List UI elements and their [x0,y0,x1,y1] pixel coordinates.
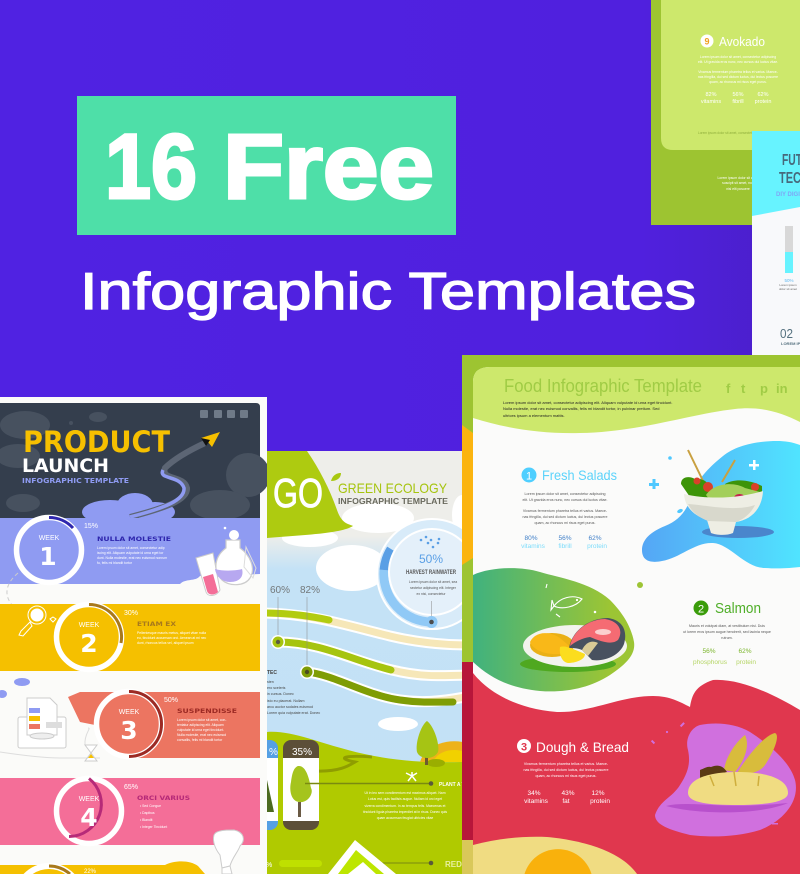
dough and bread text [524,762,609,778]
social icons [200,410,248,418]
salmon text: Mauris et volutpat diam, at vestibulum nisi. Duis [689,624,765,628]
value: 35% [292,747,312,758]
salmon stats: 62% [738,648,752,655]
avocado stats: 56% [732,92,744,98]
avocado footer text: nisl elit posuere [726,187,750,191]
percent: 15% [84,523,98,530]
salmon heading: Salmon [715,601,761,617]
fresh salads text: quam, ac rhoncus mi risus eget purus. [535,521,595,525]
gauge text: sectetur adipiscing elit. Integer [410,586,457,590]
title: product: PRODUCT [23,425,170,459]
ribbon three [307,672,470,702]
green ecology heading: GREEN ECOLOGY [338,480,448,496]
left text fragment: Lorem quia vulputate erat. Donec [267,711,320,715]
salmon text [683,624,771,640]
heading: NULLA MOLESTIE [97,535,171,543]
fresh salads stats: fibrill [558,543,572,550]
progress label: Lorem ipsum [779,283,797,287]
section number 02: 02 [780,326,793,341]
fresh salads text: Lorem ipsum dolor sit amet, consectetur adipiscing [525,492,605,496]
icon: magnifier [19,606,56,636]
body: dunt, rhoncus tellus vel, aliquet ipsum [137,641,194,645]
ribbon two [278,642,470,676]
icon: leaf [331,473,341,481]
icon: document and computer [0,698,100,761]
salmon heading [694,600,761,617]
avocado footer text: suscipit sit amet, non [722,181,754,185]
progress label [779,279,797,290]
plant a tree text: Ut in leo sem condimentum est maximus aliquet. Nam [364,791,446,795]
fresh salads stats: vitamins [521,543,546,550]
avocado body text [698,55,778,84]
small clouds [0,678,30,698]
fresh salads heading: Fresh Salads [542,467,617,483]
subtitle: Infographic Templates [80,263,696,321]
intro text: Lorem ipsum dolor sit amet, consectetur adipiscing elit. Aliquam vulputate id urna eget tincidunt. [503,400,672,405]
salmon heading: 2 [698,604,704,616]
bullet list: • Integer Tincidunt [140,825,167,829]
plant a tree text: viverra condimentum. In ac tempus felis. Maecenas et [364,804,446,808]
body: vulputate id urna eget tincidunt. [177,728,224,732]
salmon stats [693,648,756,666]
title badge [77,96,456,235]
week number: 2 [80,629,98,658]
panel: avocado template card [651,0,800,225]
avocado body text: quam, ac rhoncus mi risus eget purus. [709,80,767,84]
salmon text: ut lorem eros ipsum augue hendrerit, sed lacinia neque [683,630,771,634]
dough and bread stats: fat [562,798,570,805]
dough and bread stats [524,790,610,805]
fresh salads text: elit. Ut gravida eros nunc, nec cursus dui luctus vitae. [523,498,607,502]
avocado stats: fibrill [732,99,744,105]
future tech title [779,154,800,183]
partial progress ring [24,863,74,874]
plant a tree row: PLANT A TREE [439,782,476,788]
reduce row [266,860,479,869]
green dot [637,582,643,588]
social icons: t [741,381,746,396]
progress ring [56,778,122,844]
heading: ETIAM EX [137,620,176,628]
left text fragment: TEC [267,670,277,676]
title: 16 Free: 16 [105,116,197,218]
storm clouds [0,411,270,520]
social icons [726,384,787,396]
week label: WEEK [79,796,100,803]
periwinkle cloud [82,493,175,524]
bullet list: • Blandit [140,818,153,822]
avocado body text: nas fringilla, dui sed dictum luctus, dui lectus posuere [698,75,778,79]
section caption: LOREM IP [781,341,800,346]
title: 16 Free: Free [223,116,434,218]
percent: 50% [164,697,178,704]
week 2 band [0,604,260,671]
progress ring [56,604,122,670]
avocado stats: protein [755,99,771,105]
icon: sparkle [406,772,417,781]
left text fragment [267,670,320,715]
avocado stats: vitamins [701,99,721,105]
bullet list: • Dapibus [140,811,155,815]
header wave [473,367,800,433]
intro text: ultrices ipsum a elementum mattis. [503,413,565,418]
progress ring [16,517,82,582]
percent labels: 60% [270,585,290,596]
avocado body text: Lorem ipsum dolor sit amet, consectetur adipiscing [700,55,776,59]
body: iscing elit. Aliquam vulputate id urna eget tor [97,551,164,555]
title: infographic template: INFOGRAPHIC TEMPLATE [22,477,129,485]
fresh salads text: Vivamus fermentum pharetra tellus et varius. Maece- [523,509,608,513]
clouds [282,495,472,731]
avocado stats: 82% [705,92,717,98]
avocado footer text: Lorem ipsum dolor sit amet [718,176,758,180]
icon: tree [290,766,312,817]
icon: number 9: 9 [704,36,710,46]
bullet list [140,804,167,829]
icon: recycle triangle [328,840,396,874]
icon: tree and hill [417,721,470,767]
dough and bread stats: 34% [527,790,541,797]
body [137,631,206,645]
percent labels: 82% [300,585,320,596]
gauge marker [426,601,438,628]
icon: bread [666,733,788,812]
dark header [0,403,270,524]
panel: future tech template card [752,131,800,355]
avocado body text: elit. Ut gravida eros nunc, nec cursus dui luctus vitae. [698,60,778,64]
dough and bread stats: vitamins [524,798,549,805]
progress bar [785,226,793,273]
icon: salmon plate [520,618,627,672]
dough and bread stats: protein [590,798,610,805]
green blob [473,568,634,691]
heading: SUSPENDISSE [177,707,237,715]
week 4 band [0,778,260,845]
salmon stats: 56% [702,648,716,655]
bullet list: • Sed Congue [140,804,161,808]
cream blob with orange [473,837,637,874]
fresh salads text [523,492,608,525]
red section [473,673,800,874]
body: Lorem ipsum dolor sit amet, consectetur adip [97,546,165,550]
icon: fish [546,584,596,617]
body [97,546,167,565]
decorative plus signs [649,456,759,514]
title: launch: LAUNCH [22,455,109,477]
progress label: 50% [784,278,794,283]
infographic template subheading: INFOGRAPHIC TEMPLATE [338,496,448,506]
avocado stats: 62% [757,92,769,98]
fresh salads stats: protein [587,543,607,550]
avokado heading: Avokado [719,35,765,49]
reduce row: % [266,862,272,869]
reduce row: REDUCE [445,860,479,869]
blue blob [642,441,800,568]
progress label: dolor sit amet [779,287,797,291]
left text fragment: arcu auctor sodales euismod [267,705,313,709]
wavy ribbons [260,613,470,702]
left strip colours [462,425,473,874]
percent: 30% [124,610,138,617]
plant a tree text: Lotus est, quis facilisis augue. Nullam id orci eget [368,797,442,801]
green ground [267,732,462,874]
body: fu, felis mi blandit tortor [97,561,133,565]
week label: WEEK [79,622,100,629]
heading: ORCI VARIUS [137,794,190,802]
dough and bread heading: 3 [521,742,527,754]
week number: 1 [39,542,57,571]
ribbon markers [271,597,314,679]
salmon stats: phosphorus [693,659,728,666]
body: convallis, felis mi blandit tortor [177,738,223,742]
percent labels [270,585,320,596]
tree card: blue [240,740,278,830]
left text fragment: isto eu placerat. Nullam [267,699,305,703]
week 3 band [0,678,260,761]
progress ring [96,692,162,756]
body: tentatur adipiscing elit. Aliquam [177,723,224,727]
fresh salads stats: 56% [558,535,572,542]
plant a tree text: tincidunt ligula pharetra imperdiet at in risus. Donec quis [363,810,447,814]
gauge text: Lorem ipsum dolor sit amet, sea [409,580,457,584]
body: dunt. Nulla molestie, erat nec euismod nonrum [97,556,167,560]
left text fragment: ero sceleris [267,686,286,690]
avocado body text: Vivamus fermentum pharetra tellus et varius. Maece- [698,70,778,74]
dough and bread stats: 43% [561,790,575,797]
gauge value: 50% [419,552,443,566]
social icons: in [776,381,788,396]
body: Pellentesque mauris metus, aliquet vitae nulla [137,631,206,635]
panel: product launch template [0,397,270,874]
fresh salads heading: 1 [526,470,532,482]
road [130,443,205,517]
salmon text: rutrum. [721,636,733,640]
fresh salads stats: 62% [588,535,602,542]
icon: flask and test tube [196,527,256,596]
fresh salads text: nas fringilla, dui sed dictum luctus, dui lectus posuere [523,515,607,519]
ribbon one [260,613,470,645]
avocado footer text [718,176,758,191]
week number: 3 [120,716,138,745]
gauge text: ex nisi, consectetur [416,592,446,596]
panel: food infographic template [462,355,800,874]
gauge text [409,580,457,596]
gauge label: HARVEST RAINWATER [406,570,456,576]
plant a tree text: quam accumsan feugiat ultricies vitae [377,816,433,820]
fresh salads stats: 80% [524,535,538,542]
left text fragment: sten [267,680,274,684]
icon: salad bowl [681,450,774,538]
plant a tree row [305,781,476,788]
body [177,718,226,742]
purple blob [655,723,796,836]
icon: number 9 [700,34,714,48]
dough and bread stats: 12% [591,790,605,797]
dough and bread text: quam, ac rhoncus mi risus eget purus. [536,774,596,778]
salmon stats: protein [736,659,756,666]
avocado stats [701,92,771,105]
icon: light bulb [213,830,243,874]
week number: 4 [80,803,98,832]
icon: river path [316,756,372,771]
food title: Food Infographic Template [504,376,702,396]
social icons: p [760,381,768,396]
GO heading: GO [273,470,323,516]
week label: WEEK [39,535,60,542]
plant a tree text [363,791,447,820]
tree card: 35 percent [283,740,319,830]
week label: WEEK [119,709,140,716]
avocado footer note: Lorem ipsum dolor sit amet, consectetur [698,131,756,135]
body: Nulla molestie, erat nec euismod [177,733,226,737]
intro text: Nulla molestie, erat nec euismod convallis, felis mi blandit tortor, in pulvinar pretium. Sed [503,406,660,411]
decorative purple flecks [651,722,778,824]
week 1 band [0,517,260,596]
body: Lorem ipsum dolor sit amet, con- [177,718,226,722]
green hill [267,451,353,538]
icon: rain drops [420,536,440,548]
fresh salads stats [521,535,607,550]
dashed route [7,573,18,608]
week 5 band [0,830,243,874]
icon: paper plane [201,432,220,447]
percent: 65% [124,784,138,791]
dough and bread text: nas fringilla, dui sed dictum luctus, dui lectus posuere [524,768,608,772]
rainwater gauge [377,519,487,629]
dough and bread heading: Dough & Bread [536,739,629,755]
left text fragment: in cursus. Donec [267,692,294,696]
body: eu, tincidunt accumsan orci. Aenean at mi nec [137,636,206,640]
panel: green ecology template [267,451,462,874]
title: 16 Free [105,116,434,218]
social icons: f [726,381,731,396]
intro text [503,400,672,418]
tree card: blue: % [269,747,278,758]
dough and bread text: Vivamus fermentum pharetra tellus et varius. Maece- [524,762,609,766]
